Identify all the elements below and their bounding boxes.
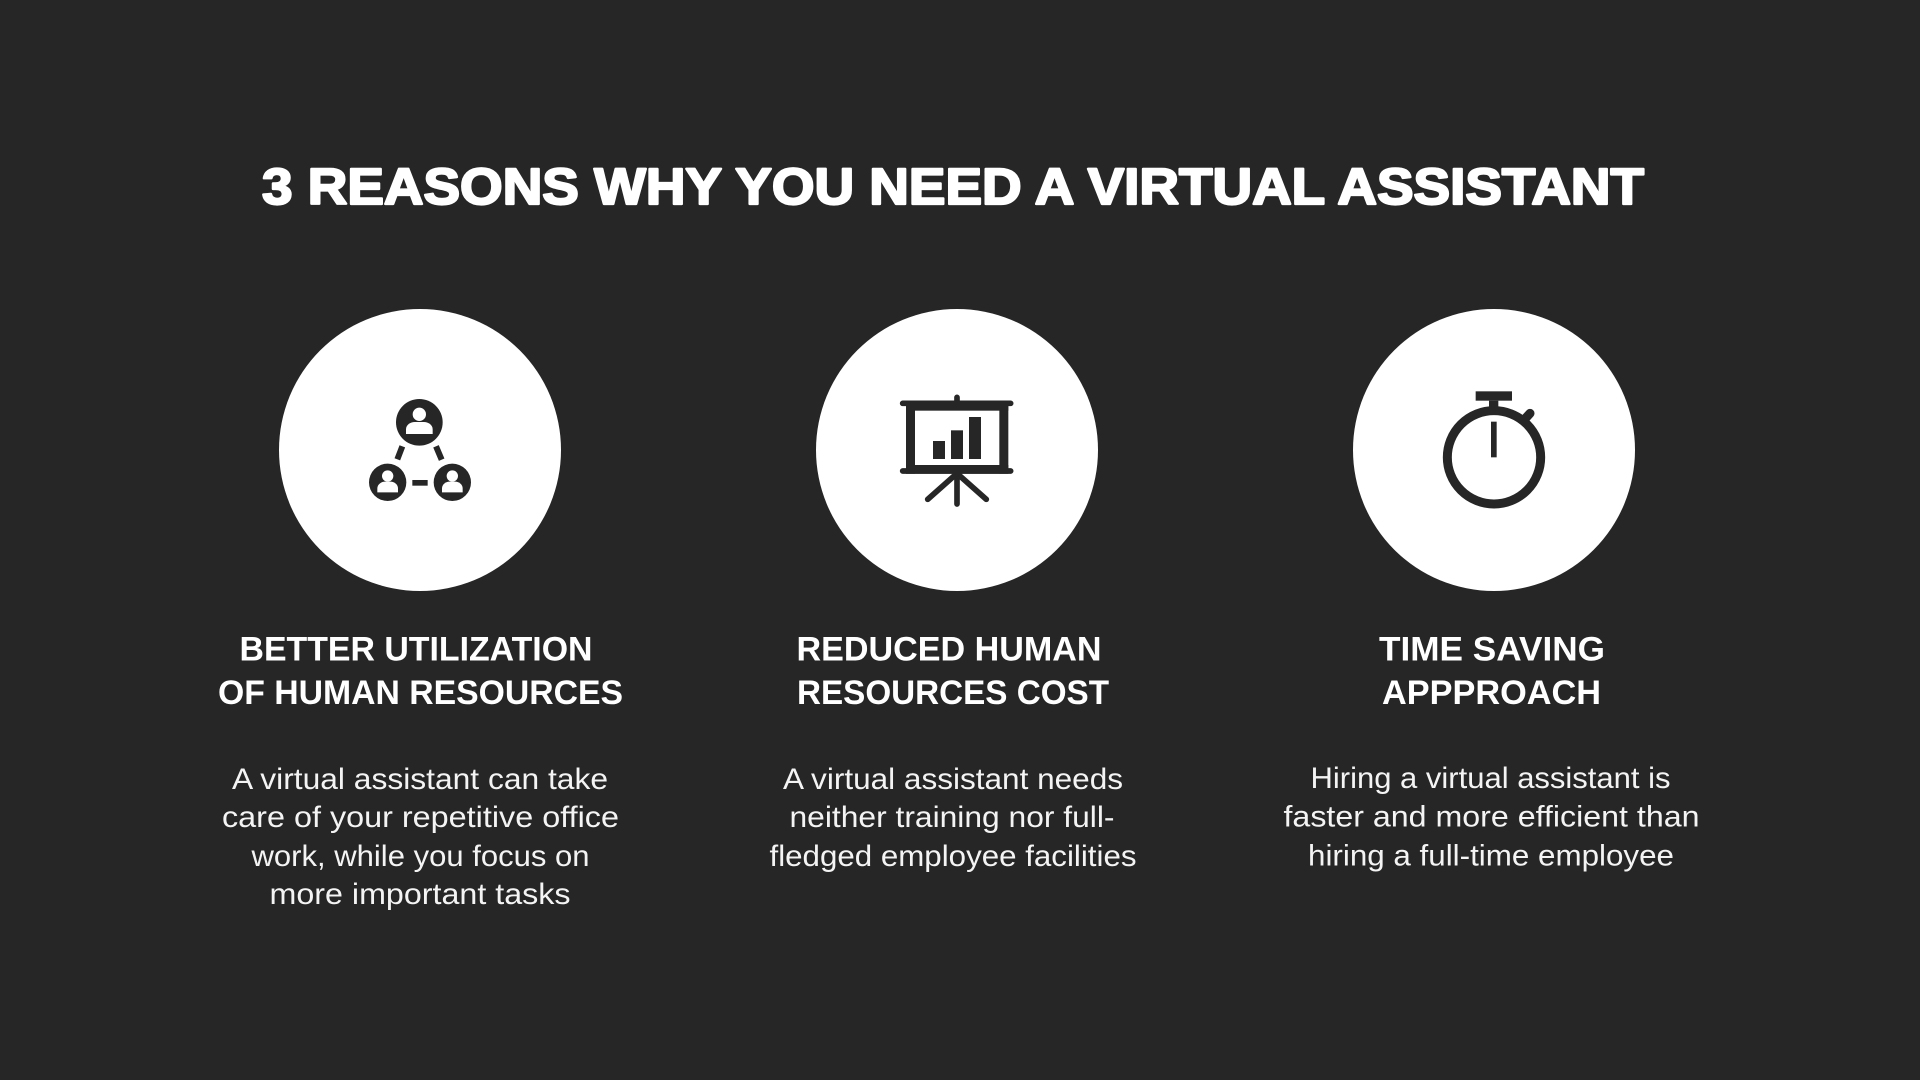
heading: better utilization: OF HUMAN RESOURCES bbox=[218, 674, 623, 712]
panel: better utilization bbox=[218, 309, 623, 911]
heading: time saving: APPPROACH bbox=[1382, 674, 1601, 712]
icon: stopwatch bbox=[1353, 309, 1635, 591]
text: better utilization description: more important tasks bbox=[270, 878, 570, 911]
text: time saving description: hiring a full-time employee bbox=[1308, 840, 1674, 872]
text: better utilization description: care of your repetitive office bbox=[222, 801, 619, 834]
heading: reduced cost: REDUCED HUMAN bbox=[796, 630, 1102, 668]
text: time saving description bbox=[1284, 762, 1700, 872]
text: reduced cost description: fledged employee facilities bbox=[770, 840, 1136, 873]
panel: reduced cost bbox=[770, 309, 1136, 873]
icon: network of people bbox=[279, 309, 561, 591]
heading: time saving bbox=[1379, 630, 1605, 712]
text: better utilization description: work, while you focus on bbox=[250, 840, 590, 873]
icon: presentation board with bar chart bbox=[816, 309, 1098, 591]
text: reduced cost description bbox=[770, 763, 1136, 873]
title: 3 REASONS WHY YOU NEED A VIRTUAL ASSISTANT bbox=[262, 158, 1644, 215]
heading: better utilization bbox=[218, 630, 623, 712]
text: better utilization description bbox=[222, 763, 619, 911]
panel: time saving bbox=[1284, 309, 1700, 872]
text: time saving description: faster and more efficient than bbox=[1284, 800, 1700, 834]
heading: better utilization: BETTER UTILIZATION bbox=[240, 630, 592, 668]
heading: time saving: TIME SAVING bbox=[1379, 630, 1605, 668]
heading: reduced cost: RESOURCES COST bbox=[797, 674, 1109, 712]
text: time saving description: Hiring a virtual assistant is bbox=[1310, 762, 1670, 795]
text: reduced cost description: neither training nor full- bbox=[790, 801, 1114, 834]
text: reduced cost description: A virtual assistant needs bbox=[783, 763, 1123, 796]
heading: reduced cost bbox=[796, 630, 1109, 712]
text: better utilization description: A virtual assistant can take bbox=[232, 763, 608, 796]
